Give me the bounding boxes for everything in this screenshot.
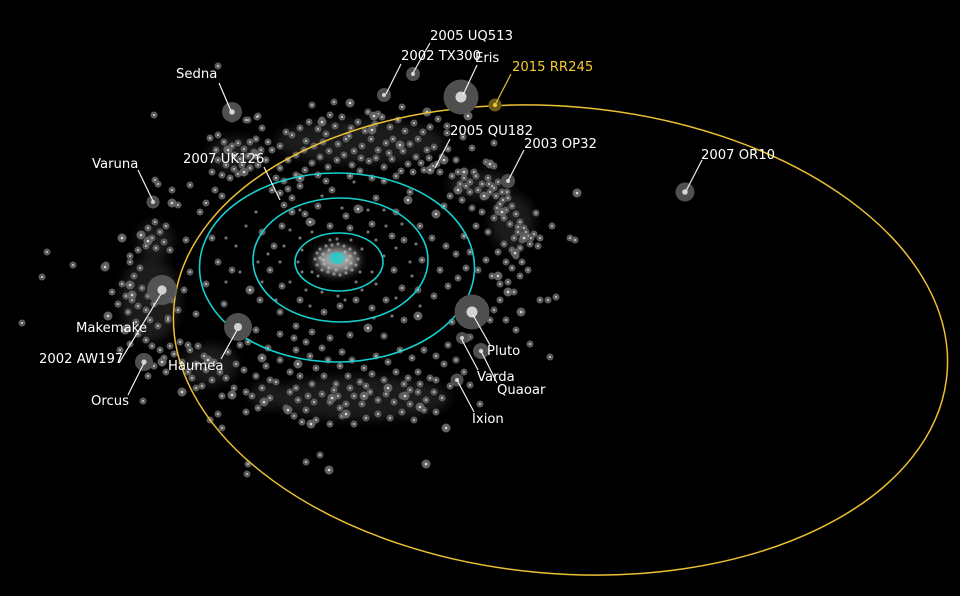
object labels: 2007 OR10 bbox=[701, 148, 775, 163]
object labels bbox=[39, 29, 775, 427]
object: Quaoar bbox=[473, 343, 489, 359]
object: Varuna bbox=[146, 196, 160, 208]
object: Orcus bbox=[135, 353, 153, 371]
belt glow: brightness of dense clusters bbox=[120, 120, 534, 420]
inner solar system cluster bbox=[316, 247, 358, 273]
object labels: Makemake bbox=[76, 321, 147, 336]
object labels: Sedna bbox=[176, 67, 217, 82]
object labels: 2005 QU182 bbox=[450, 124, 533, 139]
planet orbits bbox=[200, 173, 474, 362]
object labels: 2002 TX300 bbox=[401, 49, 481, 64]
object labels: Quaoar bbox=[497, 383, 546, 398]
object labels: Ixion bbox=[472, 412, 504, 427]
object: Makemake bbox=[147, 275, 177, 305]
object: Haumea bbox=[224, 313, 252, 341]
object: 2002 TX300 bbox=[377, 88, 391, 102]
object labels: Haumea bbox=[168, 359, 223, 374]
object labels: 2003 OP32 bbox=[524, 137, 597, 152]
object: Ixion bbox=[450, 374, 464, 386]
object: 2003 OP32 bbox=[501, 174, 515, 188]
small objects: scattered Kuiper belt dots bbox=[22, 66, 577, 474]
object labels: Eris bbox=[475, 51, 499, 66]
object: 2007 OR10 bbox=[676, 182, 694, 202]
object: Varda bbox=[456, 332, 468, 344]
object: Sedna bbox=[222, 102, 242, 122]
orbit of 2015 RR245 bbox=[154, 74, 960, 596]
object labels: Varda bbox=[477, 370, 515, 385]
object labels: 2007 UK126 bbox=[183, 152, 264, 167]
object labels: 2002 AW197 bbox=[39, 352, 123, 367]
leader lines bbox=[119, 43, 702, 412]
object labels: Orcus bbox=[91, 394, 129, 409]
object: Eris bbox=[444, 80, 478, 114]
object labels: 2015 RR245 bbox=[512, 60, 593, 75]
object labels: Varuna bbox=[92, 157, 138, 172]
object: 2015 RR245 bbox=[488, 98, 502, 112]
dwarf planets and named objects bbox=[135, 67, 694, 386]
object: Pluto bbox=[454, 294, 490, 330]
object: 2005 UQ513 bbox=[406, 67, 420, 81]
object labels: Pluto bbox=[487, 344, 520, 359]
object labels: 2005 UQ513 bbox=[430, 29, 513, 44]
